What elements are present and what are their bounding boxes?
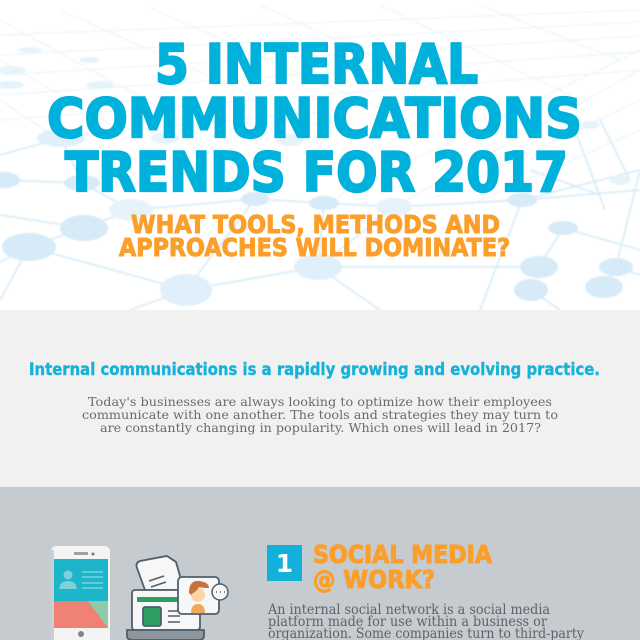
title: [47, 33, 582, 204]
trend text: An internal social network is a social media: [267, 602, 550, 618]
subtitle: APPROACHES WILL DOMINATE?: [119, 233, 510, 262]
title: COMMUNICATIONS: [47, 87, 582, 150]
icon: smartphone: [51, 546, 110, 640]
subtitle: [119, 210, 510, 262]
icon: laptop with document and video chat: [127, 556, 228, 640]
intro text: communicate with one another. The tools and strategies they may turn to: [82, 407, 558, 422]
number badge: 1: [276, 549, 293, 578]
trend heading: [313, 540, 492, 594]
panel: introduction: [0, 310, 640, 487]
intro text: [82, 394, 558, 435]
title: 5 INTERNAL: [155, 33, 478, 96]
panel: trend 1 social media: [0, 487, 640, 640]
trend text: [267, 602, 584, 640]
intro text: are constantly changing in popularity. Which ones will lead in 2017?: [100, 420, 541, 435]
trend heading: SOCIAL MEDIA: [313, 540, 492, 569]
trend text: platform made for use within a business or: [268, 614, 548, 630]
title: TRENDS FOR 2017: [65, 141, 568, 204]
intro text: Today's businesses are always looking to optimize how their employees: [88, 394, 552, 409]
panel: header network background: [0, 0, 640, 310]
trend heading: @ WORK?: [313, 565, 435, 594]
number badge: [267, 545, 302, 581]
subtitle: WHAT TOOLS, METHODS AND: [131, 210, 500, 239]
